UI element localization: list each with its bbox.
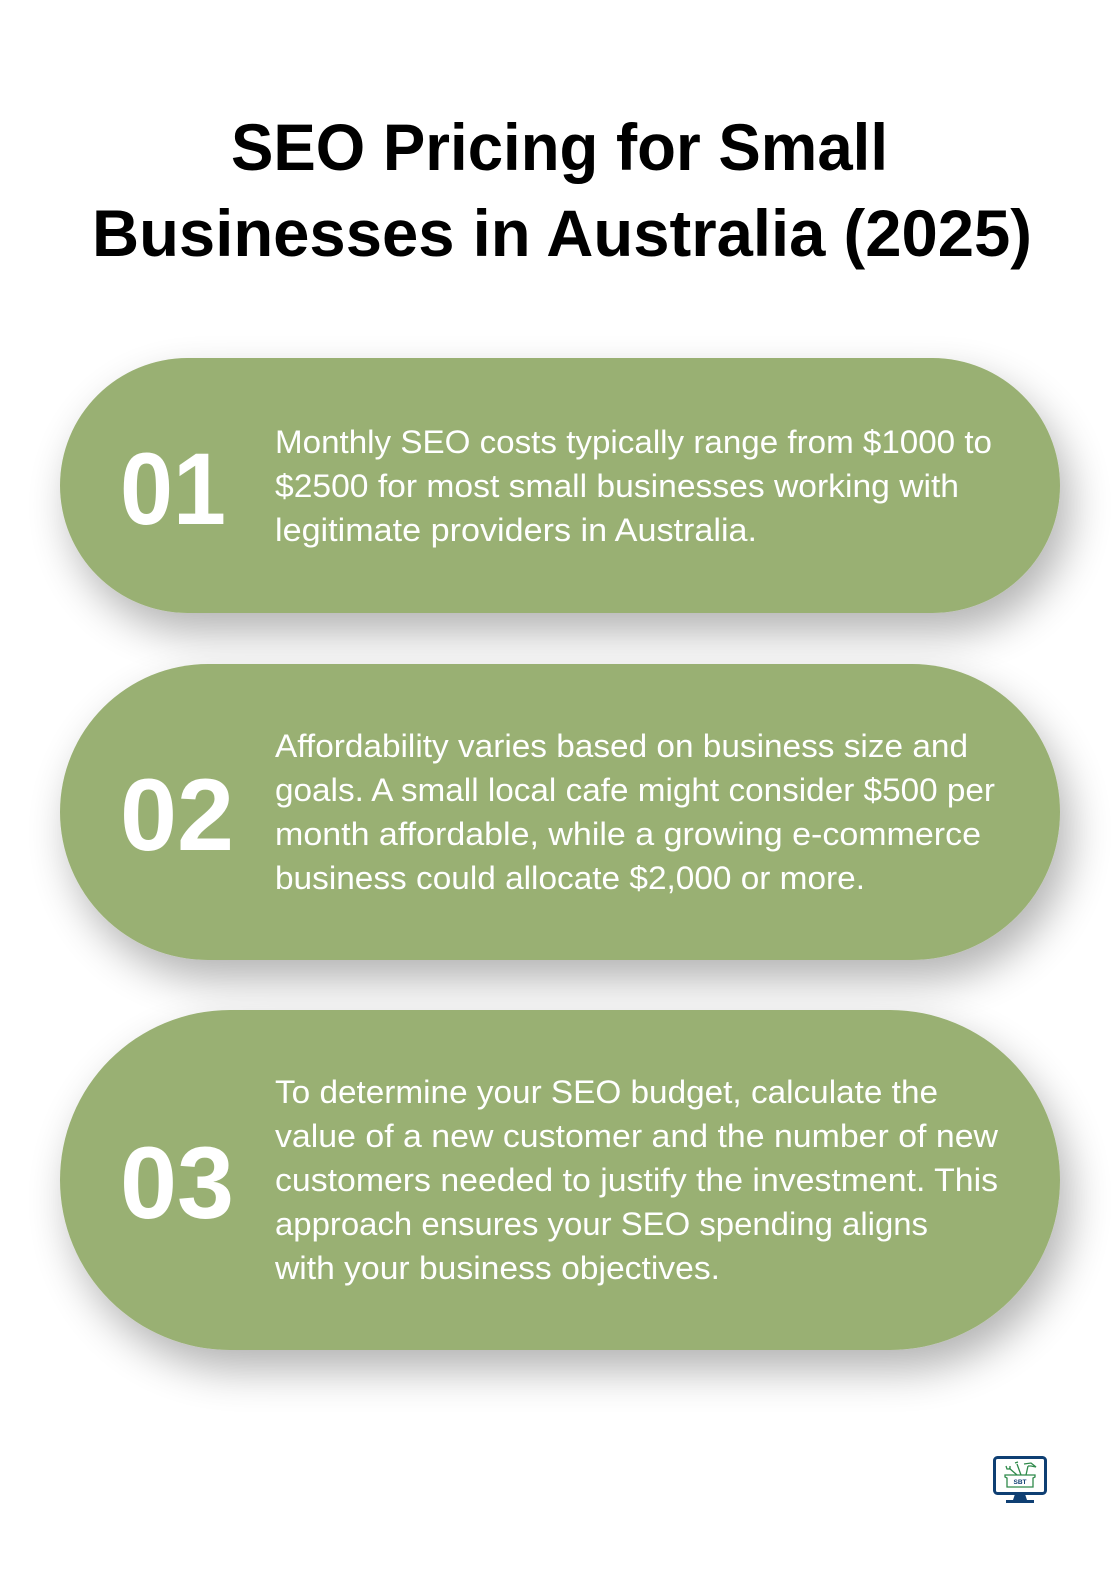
title: SEO Pricing for Small <box>231 110 888 184</box>
text: step 02 description <box>275 728 995 896</box>
title <box>92 110 1032 270</box>
text: step 01 description: $2500 for most small businesses working with <box>275 468 959 504</box>
number 01: 01 <box>120 432 226 546</box>
text: step 03 description: with your business objectives. <box>274 1250 720 1286</box>
text: step 01 description <box>275 424 992 548</box>
text: step 02 description: goals. A small local cafe might consider $500 per <box>275 772 995 808</box>
text: step 03 description: approach ensures your SEO spending aligns <box>275 1206 928 1242</box>
text: step 03 description: value of a new customer and the number of new <box>275 1118 999 1154</box>
text: step 01 description: legitimate providers in Australia. <box>275 512 757 548</box>
icon: SBT monitor logo with toolbox: SBT <box>1014 1479 1027 1486</box>
icon: SBT monitor logo with toolbox <box>994 1458 1046 1503</box>
text: step 02 description: business could allocate $2,000 or more. <box>275 860 865 896</box>
panel: step 03 <box>60 1010 1060 1350</box>
panel: step 02 <box>60 664 1060 960</box>
title: Businesses in Australia (2025) <box>92 196 1032 270</box>
text: step 02 description: month affordable, while a growing e-commerce <box>275 816 981 852</box>
number 02: 02 <box>120 758 234 872</box>
text: step 03 description: customers needed to justify the investment. This <box>275 1162 998 1198</box>
text: step 01 description: Monthly SEO costs typically range from $1000 to <box>275 424 992 460</box>
text: step 03 description: To determine your SEO budget, calculate the <box>275 1074 938 1110</box>
text: step 02 description: Affordability varies based on business size and <box>275 728 968 764</box>
text: step 03 description <box>274 1074 999 1286</box>
number 03: 03 <box>120 1126 234 1240</box>
panel: step 01 <box>60 358 1060 613</box>
